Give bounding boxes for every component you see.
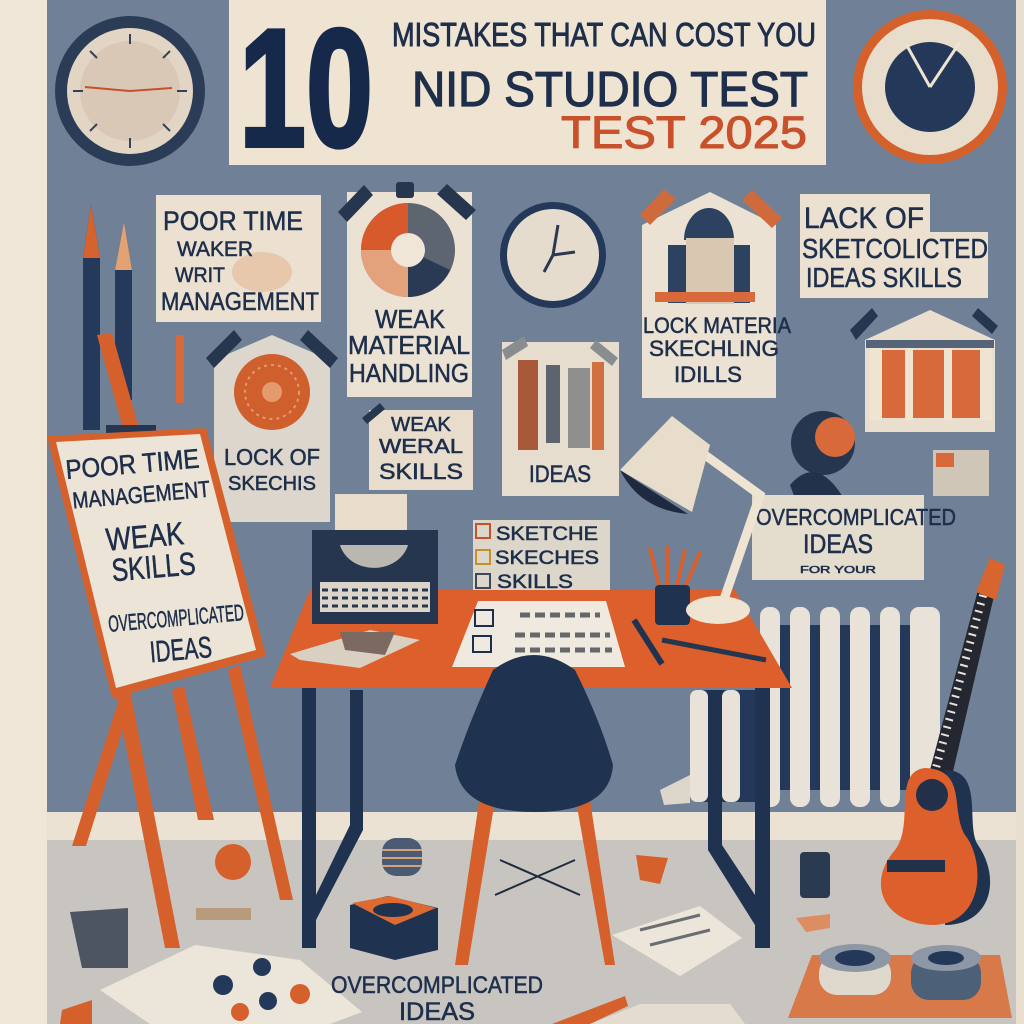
note: ideas with tools illustration (502, 336, 619, 496)
desk (270, 590, 792, 948)
note: lock of sketches with orange flower: SKECHIS (228, 473, 316, 495)
title banner: MISTAKES THAT CAN COST YOU (392, 16, 816, 53)
floor objects (70, 838, 830, 976)
note: lock of sketches with orange flower: LOCK OF (224, 444, 320, 470)
note: ideas with tools illustration: IDEAS (529, 461, 591, 488)
note: poor time management: MANAGEMENT (161, 288, 319, 316)
floor pencil and scraps (60, 996, 745, 1024)
note: weak material handling with colour wheel: MATERIAL (348, 330, 470, 360)
note: weak material handling with colour wheel (338, 182, 476, 397)
note: lack of sketching skills: SKETCOLICTED (802, 233, 988, 264)
note: house illustration lack of sketching skills: LOCK MATERIA (643, 313, 791, 338)
note: weak skills small: WERAL (379, 436, 463, 458)
note: house illustration lack of sketching skills (640, 189, 791, 398)
chair (455, 655, 615, 965)
palette papers on floor (100, 945, 362, 1024)
note: overcomplicated ideas: IDEAS (803, 529, 873, 559)
icon: building (850, 308, 998, 432)
easel with board: SKILLS (110, 545, 197, 588)
note: weak skills small (362, 403, 473, 490)
icon: wall clock left (55, 16, 205, 166)
icon: desk lamp (620, 416, 760, 624)
floor label: overcomplicated ideas: OVERCOMPLICATED (331, 972, 543, 999)
checklist note: SKECHES (495, 548, 599, 569)
easel with board: MANAGEMENT (71, 476, 211, 514)
note: poor time management: POOR TIME (163, 206, 303, 236)
note: lack of sketching skills: IDEAS SKILLS (806, 262, 962, 293)
floor label: overcomplicated ideas (331, 972, 543, 1024)
note: weak skills small: SKILLS (379, 459, 463, 484)
note: poor time management: WAKER (177, 238, 253, 261)
checklist note (473, 520, 610, 593)
note: poor time management (156, 195, 321, 322)
icon: pencils (83, 204, 184, 430)
easel with board (47, 333, 293, 948)
title banner (229, 0, 826, 182)
note: overcomplicated ideas: FOR YOUR (800, 565, 876, 576)
note: weak material handling with colour wheel: WEAK (375, 304, 446, 334)
checklist note: SKILLS (497, 572, 573, 593)
note: house illustration lack of sketching skills: IDILLS (674, 362, 742, 387)
icon: abstract figure (790, 411, 989, 512)
easel with board: WEAK (104, 515, 185, 558)
radiator (660, 607, 940, 807)
icon: wall clock right (853, 10, 1007, 164)
stacked discs on board (788, 944, 1012, 1018)
typewriter (312, 494, 438, 624)
icon: centre wall clock (500, 202, 606, 308)
easel with board: OVERCOMPLICATED (107, 599, 245, 637)
note: weak skills small: WEAK (391, 414, 452, 436)
note: lack of sketching skills (800, 194, 988, 298)
guitar (881, 558, 1005, 925)
note: poor time management: WRIT (175, 264, 225, 287)
title banner: TEST 2025 (561, 107, 807, 158)
note: lock of sketches with orange flower (206, 330, 338, 522)
title banner: NID STUDIO TEST (412, 63, 808, 117)
easel with board: POOR TIME (64, 443, 201, 485)
note: house illustration lack of sketching skills: SKECHLING (649, 336, 779, 361)
note: overcomplicated ideas (752, 495, 956, 580)
note: lack of sketching skills: LACK OF (804, 202, 924, 235)
note: overcomplicated ideas: OVERCOMPLICATED (756, 504, 956, 530)
note: weak material handling with colour wheel: HANDLING (349, 358, 469, 388)
checklist note: SKETCHE (496, 524, 598, 545)
desk items (290, 545, 766, 668)
easel with board: IDEAS (149, 631, 213, 669)
